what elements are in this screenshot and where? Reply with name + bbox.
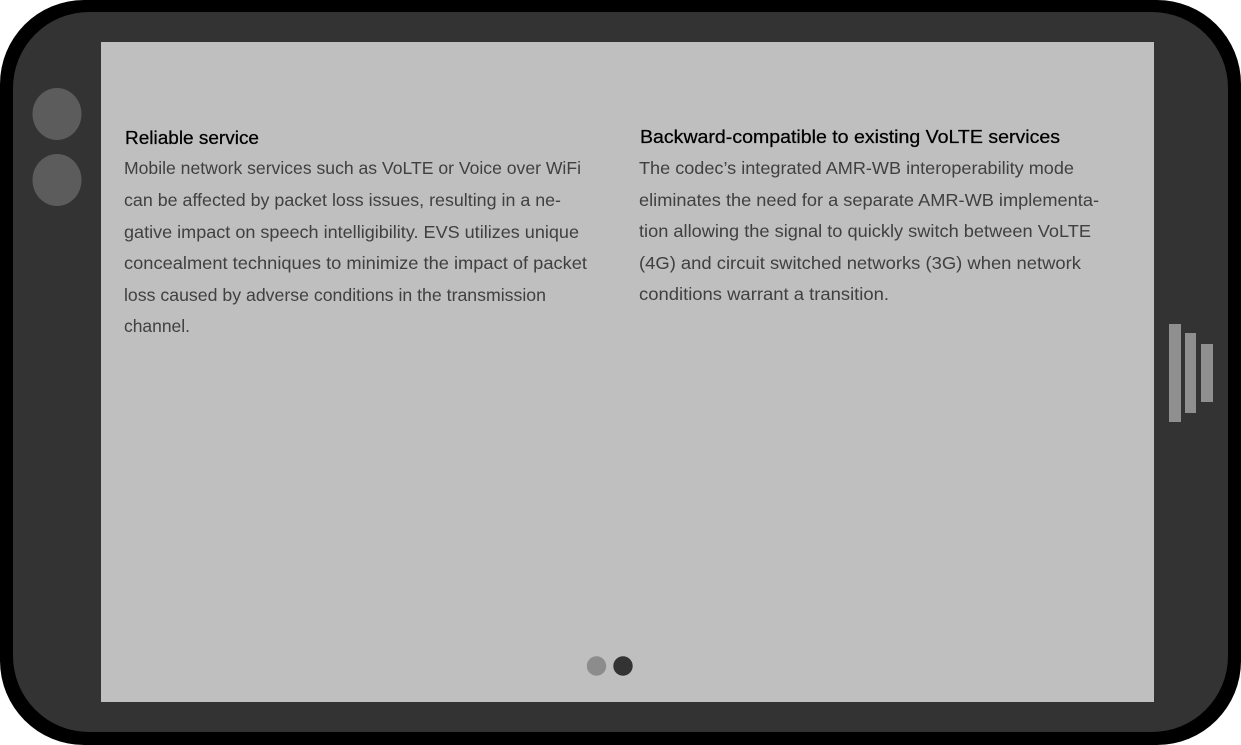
body text: reliable service: channel. [124,316,190,336]
heading: reliable service: Reliable service [125,128,259,148]
heading: backward-compatible: Backward-compatible to existing VoLTE services [640,127,1060,147]
icon: left phone buttons [32,88,82,206]
body text: backward-compatible: eliminates the need for a separate AMR-WB implementa- [639,190,1099,210]
body text: backward-compatible [639,158,1099,304]
body text: reliable service: Mobile network services such as VoLTE or Voice over WiFi [124,158,581,178]
body text: backward-compatible: (4G) and circuit switched networks (3G) when network [639,253,1081,273]
icon: right speaker bars [1169,324,1213,422]
body text: reliable service: concealment techniques to minimize the impact of packet [124,253,587,273]
body text: backward-compatible: tion allowing the signal to quickly switch between VoLTE [639,221,1091,241]
body text: reliable service: gative impact on speech intelligibility. EVS utilizes unique [124,222,579,242]
body text: reliable service [124,158,587,336]
screen panel [101,42,1154,702]
body text: reliable service: can be affected by packet loss issues, resulting in a ne- [124,190,561,210]
text block: backward-compatible [639,127,1099,304]
text block: reliable service [124,128,587,336]
pagination dots [587,656,633,676]
body text: backward-compatible: The codec’s integrated AMR-WB interoperability mode [639,158,1074,178]
body text: reliable service: loss caused by adverse conditions in the transmission [124,285,546,305]
body text: backward-compatible: conditions warrant a transition. [639,284,889,304]
